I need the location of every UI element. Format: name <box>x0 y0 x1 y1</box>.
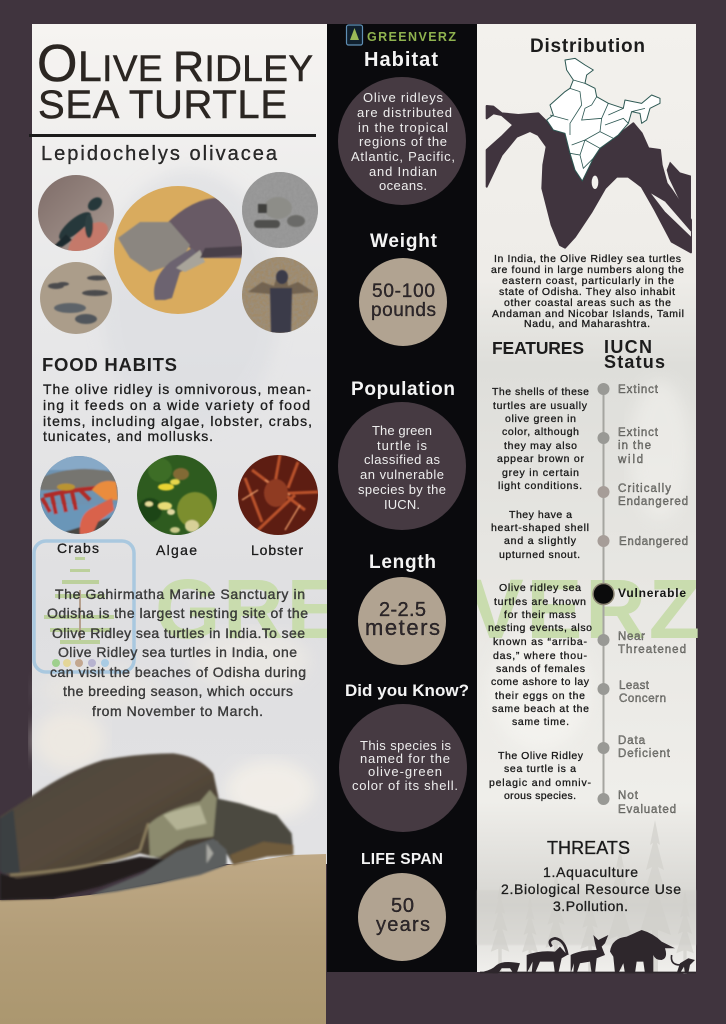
text: features list: light conditions. <box>498 480 582 492</box>
circle: habitat text: in the tropical <box>358 120 448 135</box>
chart: IUCN status timeline <box>593 383 688 816</box>
circle: length value <box>358 577 446 665</box>
text: features list: orous species. <box>504 790 576 802</box>
text: features list: They have a <box>509 509 572 521</box>
text: food habits description: The olive ridley is omnivorous, mean- <box>43 381 311 397</box>
text: features list: das,” where thou- <box>493 650 588 662</box>
circle: habitat text <box>338 77 466 205</box>
circle: did you know text: named for the <box>360 751 450 766</box>
text: features list: Olive ridley sea <box>499 582 581 594</box>
chart: IUCN status timeline: Endangered <box>619 536 688 548</box>
text: features list: heart-shaped shell <box>491 522 589 534</box>
heading: threats: THREATS <box>547 838 630 858</box>
photo: turtle nest in grayscale <box>242 172 318 248</box>
text: features list: The Olive Ridley <box>498 750 584 762</box>
circle: weight value <box>359 258 447 346</box>
chart: IUCN status timeline: Near <box>618 631 645 643</box>
circle: population text: turtle is <box>377 438 428 453</box>
circle: did you know text <box>339 704 467 832</box>
circle: did you know text: olive-green <box>368 764 442 779</box>
chart: IUCN status timeline: Extinct <box>618 384 659 396</box>
watermark: Greenverz logo and wordmark: GREENVERZ <box>155 562 700 656</box>
chart: IUCN status timeline: Deficient <box>618 748 671 760</box>
text: features list: come ashore to lay <box>491 676 590 688</box>
heading: population: Population <box>351 379 455 400</box>
text: distribution description: eastern coast, particularly in the <box>502 275 674 287</box>
heading: length: Length <box>369 552 436 573</box>
circle: habitat text: are distributed <box>357 105 452 120</box>
illustration: adult olive ridley turtle <box>0 753 293 900</box>
text: Gahirmatha Marine Sanctuary paragraph: Odisha is the largest nesting site of the <box>47 605 308 621</box>
text: features list: color, although <box>502 426 579 438</box>
photo: hatchling on hand <box>38 175 114 251</box>
text: Gahirmatha Marine Sanctuary paragraph <box>47 586 308 719</box>
circle: habitat text: oceans. <box>379 178 427 193</box>
text: distribution description: state of Odisha. They also inhabit <box>499 286 675 298</box>
circle: population text: IUCN. <box>384 497 420 512</box>
text: features list: and a slightly <box>504 535 577 547</box>
heading: weight: Weight <box>370 231 438 252</box>
illustration: animal silhouettes <box>480 930 696 973</box>
circle: population text <box>338 402 466 530</box>
text: features list: sea turtle is a <box>504 763 576 775</box>
panel: center dark column background <box>327 24 477 972</box>
title divider <box>29 134 316 137</box>
map: India and the surrounding sea <box>487 58 691 252</box>
food photo: lobster <box>238 455 318 535</box>
label: crabs: Crabs <box>57 540 99 556</box>
text: distribution description: Andaman and Nicobar Islands, Tamil <box>492 308 684 320</box>
text: features list: olive green in <box>505 413 576 425</box>
heading: habitat: Habitat <box>364 49 438 71</box>
text: features list: their eggs on the <box>495 690 585 702</box>
circle: habitat text: Olive ridleys <box>363 90 444 105</box>
heading: features: FEATURES <box>492 338 584 358</box>
text: features list: upturned snout. <box>499 549 580 561</box>
text: features list: pelagic and omniv- <box>489 777 592 789</box>
text: features list: same time. <box>512 716 569 728</box>
circle: did you know text: This species is <box>360 738 452 753</box>
text: threats list: 1.Aquaculture <box>543 864 638 880</box>
circle: population text: classified as <box>364 452 440 467</box>
text: threats list: 3.Pollution. <box>553 898 628 914</box>
chart: IUCN status timeline: Data <box>618 735 646 747</box>
text: threats list <box>501 864 681 914</box>
text: Gahirmatha Marine Sanctuary paragraph: can visit the beaches of Odisha during <box>50 664 306 680</box>
text: Gahirmatha Marine Sanctuary paragraph: from November to March. <box>92 703 263 719</box>
text: Gahirmatha Marine Sanctuary paragraph: Olive Ridley sea turtles in India, one <box>58 644 297 660</box>
illustration: misty forest <box>477 820 696 974</box>
text: features list: turtles are known <box>494 596 586 608</box>
food photo: algae <box>137 455 217 535</box>
panel: right column background <box>477 24 696 972</box>
chart: IUCN status timeline: Vulnerable <box>618 586 686 600</box>
text: features list: The shells of these <box>492 386 589 398</box>
circle: habitat text: Atlantic, Pacific, <box>351 149 455 164</box>
circle: weight value: pounds <box>371 300 436 321</box>
text: threats list: 2.Biological Resource Use <box>501 881 681 897</box>
panel: left information column <box>32 24 327 864</box>
text: distribution description: other coastal areas such as the <box>504 297 671 309</box>
text: food habits description: ing it feeds on a wide variety of food <box>43 397 310 413</box>
text: features list <box>488 386 592 802</box>
label: algae: Algae <box>156 542 197 558</box>
chart: IUCN status timeline: Evaluated <box>618 804 676 816</box>
chart: IUCN status timeline: Threatened <box>618 644 686 656</box>
illustration: sandy beach <box>0 854 326 1024</box>
text: features list: appear brown or <box>497 453 584 465</box>
text: food habits description: items, including algae, lobster, crabs, <box>43 413 312 429</box>
title: SEA TURTLE <box>38 83 287 127</box>
heading: distribution: Distribution <box>530 36 645 57</box>
chart: IUCN status timeline: Not <box>618 790 639 802</box>
logo: Greenverz <box>346 25 456 45</box>
heading: IUCN status: Status <box>604 352 665 372</box>
heading: IUCN status <box>604 337 665 372</box>
circle: length value: meters <box>365 615 440 640</box>
title: OLIVERIDLEY <box>37 35 313 93</box>
text: features list: grey in certain <box>502 467 579 479</box>
heading: IUCN status: IUCN <box>604 337 652 357</box>
photo: adult turtle on sand <box>114 186 243 314</box>
chart: IUCN status timeline: wild <box>617 454 643 466</box>
text: features list: nesting events, also <box>488 622 592 634</box>
text: Gahirmatha Marine Sanctuary paragraph: the breeding season, which occurs <box>63 683 293 699</box>
heading: food habits: FOOD HABITS <box>42 354 177 375</box>
text: distribution description: In India, the Olive Ridley sea turtles <box>494 253 681 265</box>
chart: IUCN status timeline: Endangered <box>618 496 688 508</box>
text: food habits description <box>43 381 312 444</box>
photo: hatchlings on beach <box>40 262 112 334</box>
text: distribution description: Nadu, and Maharashtra. <box>524 318 650 330</box>
circle: habitat text: regions of the <box>359 134 447 149</box>
circle: life span value: 50 <box>391 895 414 917</box>
text: features list: known as “arriba- <box>493 636 588 648</box>
chart: IUCN status timeline: in the <box>618 440 651 452</box>
text: Gahirmatha Marine Sanctuary paragraph: Olive Ridley sea turtles in India.To see <box>52 625 305 641</box>
text: features list: turtles are usually <box>493 400 588 412</box>
circle: length value: 2-2.5 <box>379 599 426 621</box>
chart: IUCN status timeline: Extinct <box>618 427 659 439</box>
logo: Greenverz: GREENVERZ <box>367 30 456 44</box>
heading: life span: LIFE SPAN <box>361 851 443 868</box>
heading: did you know: Did you Know? <box>345 681 469 700</box>
text: features list: they may also <box>504 440 577 452</box>
label: lobster: Lobster <box>251 542 303 558</box>
circle: did you know text: color of its shell. <box>352 778 458 793</box>
chart: IUCN status timeline: Least <box>619 680 650 692</box>
circle: population text: The green <box>372 423 432 438</box>
text: features list: same beach at the <box>492 703 589 715</box>
text: features list: for their mass <box>504 609 576 621</box>
circle: life span value: years <box>376 914 430 936</box>
text: distribution description: are found in large numbers along the <box>491 264 684 276</box>
text: food habits description: tunicates, and mollusks. <box>43 428 213 444</box>
circle: weight value: 50-100 <box>372 281 435 302</box>
circle: population text: species by the <box>358 482 446 497</box>
text: distribution description <box>491 253 684 330</box>
circle: habitat text: and Indian <box>369 164 437 179</box>
chart: IUCN status timeline: Concern <box>619 693 666 705</box>
circle: population text: an vulnerable <box>360 467 444 482</box>
chart: IUCN status timeline: Critically <box>618 483 671 495</box>
text: Gahirmatha Marine Sanctuary paragraph: The Gahirmatha Marine Sanctuary in <box>55 586 305 602</box>
watermark: letters across the right panel: GREENVERZ <box>155 562 700 656</box>
food photo: crabs <box>40 456 118 535</box>
circle: life span value <box>358 873 446 961</box>
title <box>37 35 313 127</box>
photo: hatchling from above <box>242 257 318 333</box>
text: features list: sands of females <box>496 663 585 675</box>
watermark: Greenverz logo and wordmark <box>34 541 700 672</box>
subtitle: scientific name: Lepidochelys olivacea <box>41 143 278 165</box>
